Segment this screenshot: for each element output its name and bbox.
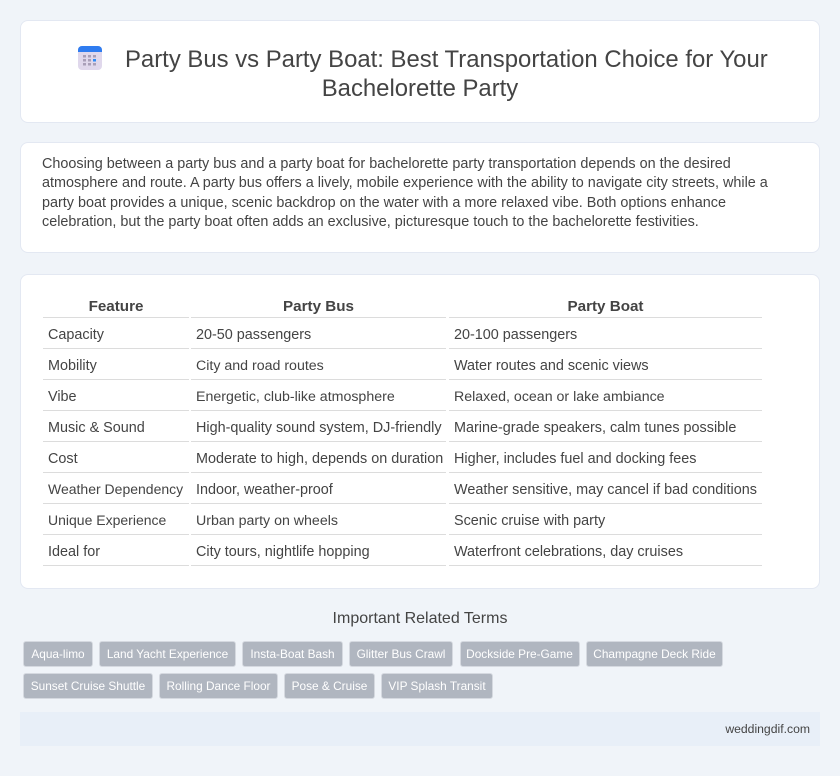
row: vibe: Vibe xyxy=(48,389,77,405)
tag: Dockside Pre-Game xyxy=(466,647,573,661)
row: capacity: 20-100 passengers xyxy=(454,327,577,343)
tag xyxy=(284,673,375,699)
intro text: Choosing between a party bus and a party boat for bachelorette party transportation depends on the desired xyxy=(42,156,731,172)
related terms tags xyxy=(23,641,723,699)
intro text: atmosphere and route. A party bus offers a lively, mobile experience with the ability to navigate city streets, while a xyxy=(42,175,768,191)
title: Bachelorette Party xyxy=(322,75,518,102)
tag: Sunset Cruise Shuttle xyxy=(31,679,145,693)
row: cost xyxy=(48,451,696,467)
tag: Glitter Bus Crawl xyxy=(357,647,445,661)
tag xyxy=(586,641,723,667)
row: ideal for: Waterfront celebrations, day cruises xyxy=(454,544,683,560)
tag: Pose & Cruise xyxy=(292,679,367,693)
tag xyxy=(460,641,580,667)
row: ideal for xyxy=(48,544,683,560)
row: weather dependency: Weather sensitive, may cancel if bad conditions xyxy=(454,482,757,498)
row: unique experience: Unique Experience xyxy=(48,512,166,528)
row: music and sound: Marine-grade speakers, calm tunes possible xyxy=(454,420,736,436)
intro text xyxy=(42,156,768,230)
tag: Land Yacht Experience xyxy=(107,647,228,661)
intro text: celebration, but the party boat often adds an exclusive, picturesque touch to the bachelorette festivities. xyxy=(42,214,699,230)
row: mobility: Mobility xyxy=(48,358,97,374)
row: ideal for: City tours, nightlife hopping xyxy=(196,544,370,560)
tag: VIP Splash Transit xyxy=(388,679,486,693)
tag: Aqua-limo xyxy=(31,647,85,661)
row: capacity: Capacity xyxy=(48,327,104,343)
row: mobility xyxy=(48,358,649,374)
table header: Feature xyxy=(89,298,143,315)
tag xyxy=(349,641,453,667)
row: weather dependency: Weather Dependency xyxy=(48,481,183,497)
row: cost: Higher, includes fuel and docking fees xyxy=(454,451,696,467)
tag xyxy=(242,641,343,667)
related terms heading: Important Related Terms xyxy=(333,610,507,627)
row: music and sound xyxy=(48,420,736,436)
row: vibe xyxy=(48,389,665,405)
tag xyxy=(159,673,278,699)
tag: Champagne Deck Ride xyxy=(593,647,716,661)
tag xyxy=(23,641,93,667)
row: weather dependency: Indoor, weather-proof xyxy=(196,482,333,498)
footer source: weddingdif.com xyxy=(725,722,810,736)
comparison table xyxy=(43,298,762,566)
row: music and sound: High-quality sound system, DJ-friendly xyxy=(196,420,442,436)
row: vibe: Relaxed, ocean or lake ambiance xyxy=(454,389,665,405)
title xyxy=(125,46,768,102)
footer bar xyxy=(20,712,820,746)
icon: calendar xyxy=(78,46,102,70)
tag xyxy=(99,641,236,667)
row: unique experience: Scenic cruise with party xyxy=(454,513,605,529)
row: unique experience xyxy=(48,512,606,529)
table header: Party Boat xyxy=(568,298,643,315)
row: mobility: City and road routes xyxy=(196,358,324,374)
table header xyxy=(89,298,644,315)
table header: Party Bus xyxy=(283,298,354,315)
row: capacity xyxy=(48,327,577,343)
row: weather dependency xyxy=(48,481,757,498)
tag: Rolling Dance Floor xyxy=(166,679,270,693)
row: music and sound: Music & Sound xyxy=(48,420,145,436)
row: unique experience: Urban party on wheels xyxy=(196,513,338,529)
row: capacity: 20-50 passengers xyxy=(196,327,311,343)
tag: Insta-Boat Bash xyxy=(250,647,335,661)
title: Party Bus vs Party Boat: Best Transportation Choice for Your xyxy=(125,46,768,73)
row: mobility: Water routes and scenic views xyxy=(454,358,649,374)
row: ideal for: Ideal for xyxy=(48,544,100,560)
intro card xyxy=(20,142,820,253)
row: cost: Moderate to high, depends on duration xyxy=(196,451,443,467)
row: cost: Cost xyxy=(48,451,78,467)
comparison table card xyxy=(20,274,820,589)
tag xyxy=(381,673,493,699)
row: vibe: Energetic, club-like atmosphere xyxy=(196,389,395,405)
header card xyxy=(20,20,820,123)
tag xyxy=(23,673,153,699)
intro text: party boat provides a unique, scenic backdrop on the water with a more relaxed vibe. Both options enhance xyxy=(42,194,726,210)
